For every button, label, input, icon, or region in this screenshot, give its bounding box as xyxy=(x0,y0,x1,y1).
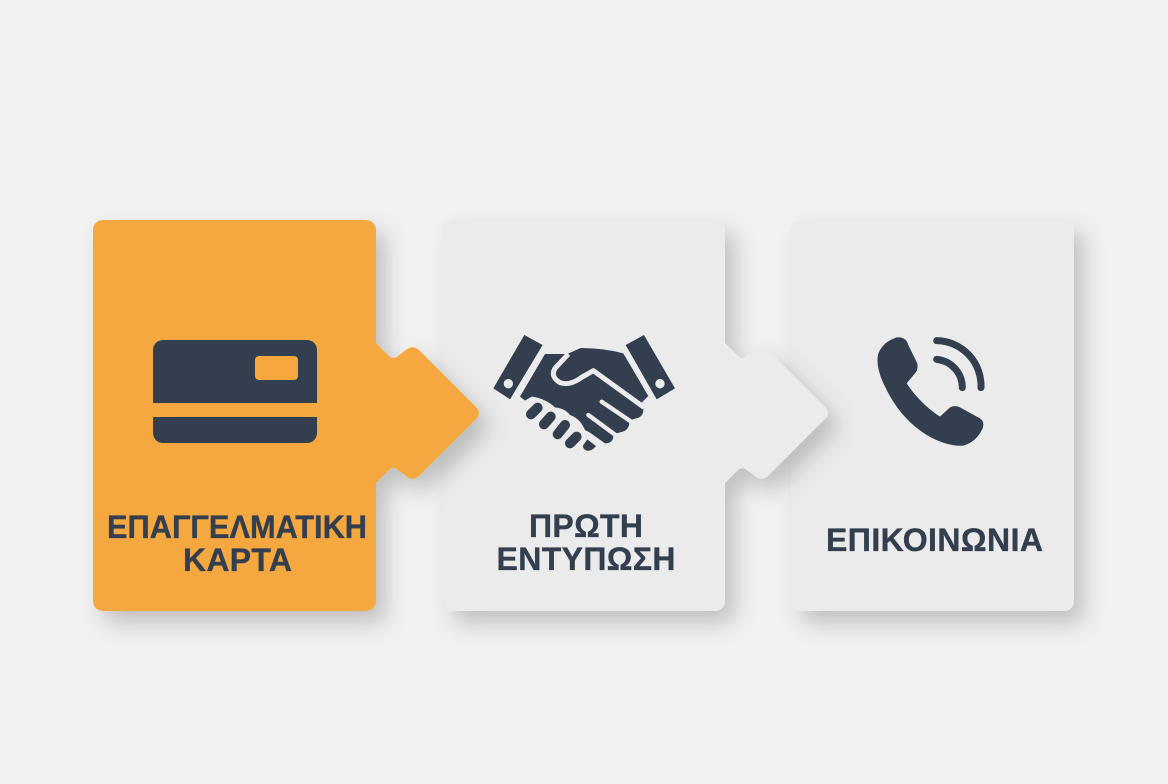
label: first impression xyxy=(496,508,676,577)
label: business card: ΚΑΡΤΑ xyxy=(183,542,292,578)
label: business card: ΕΠΑΓΓΕΛΜΑΤΙΚΗ xyxy=(107,509,367,545)
icon: handshake xyxy=(493,335,675,451)
icon: credit card xyxy=(153,340,317,443)
label: business card xyxy=(107,509,367,578)
panel: contact xyxy=(791,220,1074,611)
label: contact: ΕΠΙΚΟΙΝΩΝΙΑ xyxy=(826,522,1043,558)
panel: first impression xyxy=(443,220,828,611)
icon: phone xyxy=(877,337,983,446)
label: first impression: ΕΝΤΥΠΩΣΗ xyxy=(496,541,676,577)
panel: business card xyxy=(93,220,479,611)
label: first impression: ΠΡΩΤΗ xyxy=(529,508,643,544)
